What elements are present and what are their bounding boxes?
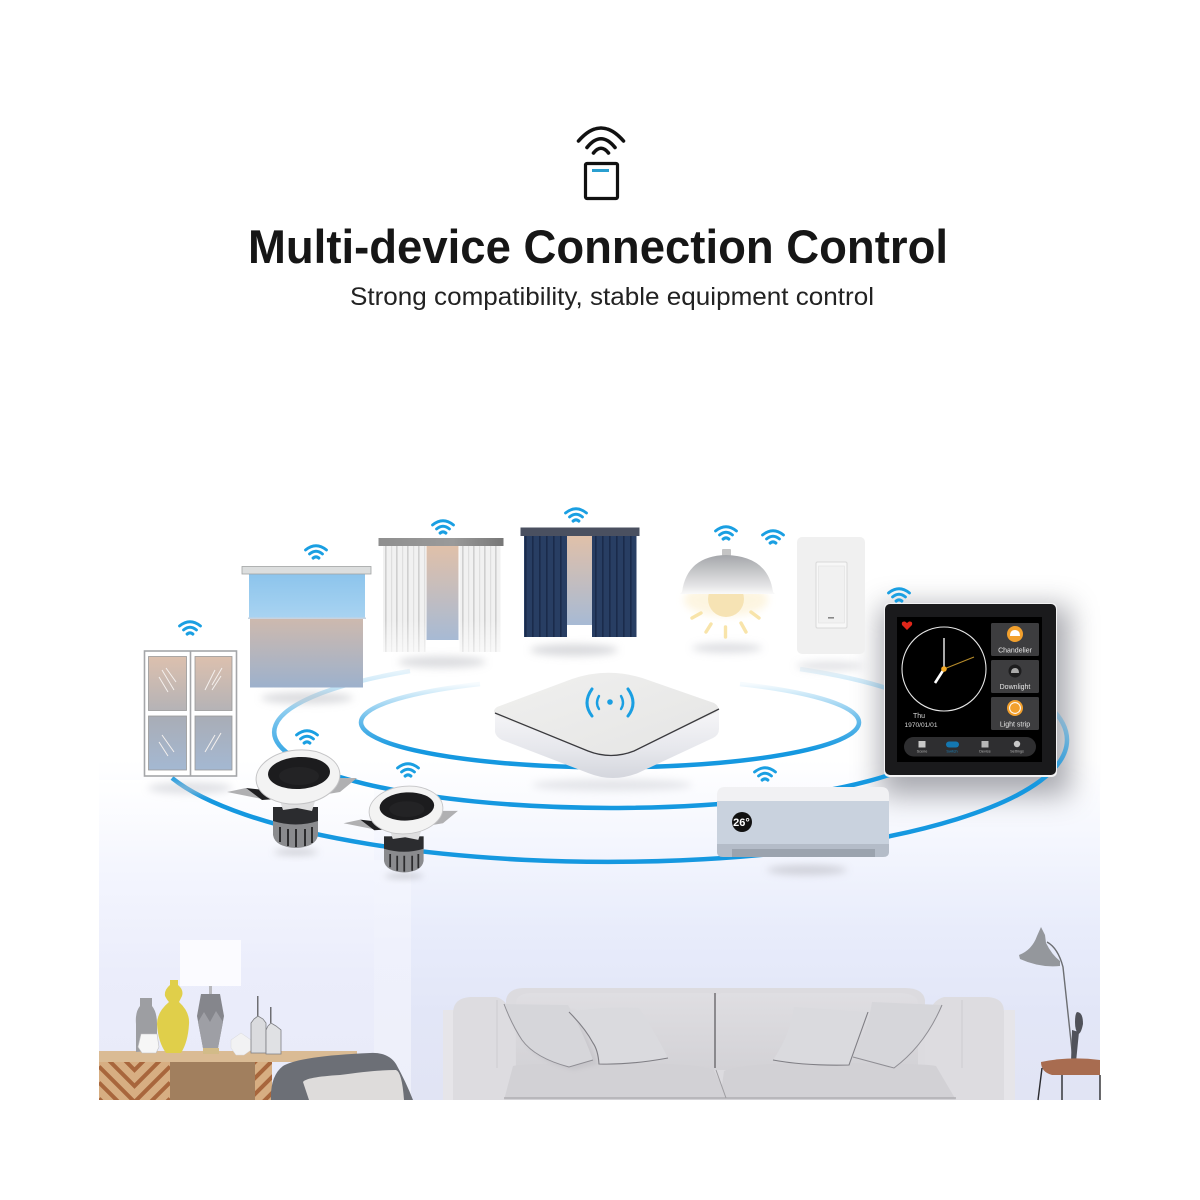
- card: Chandelier: [991, 623, 1039, 656]
- wifi icon: sheer curtain: [432, 521, 454, 533]
- wifi icon: touch panel: [888, 589, 910, 601]
- signal ring: outer: [172, 707, 1067, 862]
- subtitle: Strong compatibility, stable equipment control: [350, 283, 874, 311]
- wifi icon: navy curtain: [566, 509, 586, 521]
- device: wall switch: [796, 537, 865, 671]
- device: downlight large: [227, 746, 357, 854]
- navigation bar: Settings: [1010, 750, 1024, 754]
- card: Chandelier: Chandelier: [998, 648, 1033, 654]
- navigation bar: Device: [979, 750, 991, 754]
- wifi icon: pendant lamp: [716, 527, 736, 539]
- wifi icon: window: [180, 622, 200, 634]
- icon: wifi phone: [578, 128, 624, 198]
- icon: signal waves: [587, 689, 633, 716]
- floor lamp and side table: [1019, 927, 1100, 1100]
- heart: [902, 621, 912, 630]
- signal ring: middle: [274, 669, 948, 808]
- signal ring: inner: [361, 684, 859, 767]
- wifi icon: wall switch: [762, 531, 784, 543]
- device: roller blind: [242, 566, 371, 704]
- navigation bar: Scene: [917, 750, 927, 754]
- room background: [99, 760, 1100, 1100]
- sofa: [443, 988, 1015, 1100]
- card: Light strip: [991, 697, 1039, 730]
- armchair: [271, 1053, 413, 1100]
- wifi icon: roller blind: [306, 546, 326, 558]
- navigation bar: Switch: [946, 750, 958, 754]
- clock: [902, 627, 986, 711]
- device: smart touch panel: [884, 603, 1057, 777]
- device: hub gateway: [494, 673, 719, 791]
- device: pendant lamp: [680, 549, 775, 653]
- wifi icon: downlight small: [398, 764, 418, 776]
- device: sheer curtain: [378, 538, 504, 668]
- card: Light strip: Light strip: [1000, 722, 1030, 728]
- device: smart touch panel: 1970/01/01: [904, 722, 938, 729]
- device: french window: [144, 651, 236, 794]
- navigation bar: [904, 737, 1036, 756]
- card: Downlight: [991, 660, 1039, 693]
- device: air conditioner: 26°: [733, 817, 750, 829]
- title: Multi-device Connection Control: [248, 220, 948, 273]
- wifi icon: air conditioner: [754, 768, 776, 780]
- table lamp: [180, 940, 241, 1054]
- touch panel shadow: [880, 606, 1070, 796]
- date: Thu: [913, 713, 925, 720]
- vases: [136, 980, 281, 1055]
- device: air conditioner: [717, 787, 889, 875]
- sideboard with decor: [99, 940, 357, 1100]
- device: navy curtain: [520, 528, 640, 656]
- card: Downlight: Downlight: [1000, 684, 1030, 691]
- wifi icon: downlight large: [296, 731, 318, 743]
- pillows: [504, 1002, 942, 1070]
- device: downlight small: [344, 783, 458, 878]
